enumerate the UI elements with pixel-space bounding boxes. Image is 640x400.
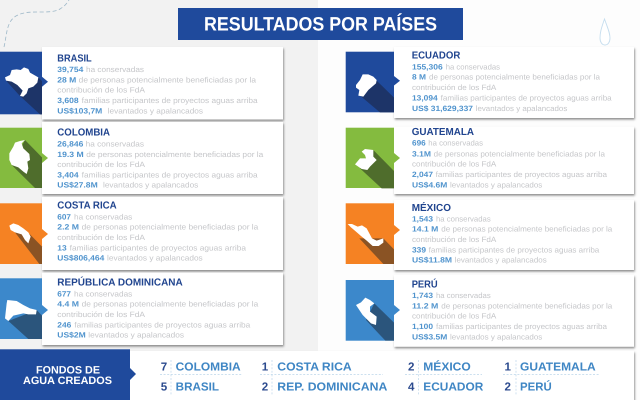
text: República Dominicana results: US$2M [57, 331, 86, 340]
text: Ecuador results: familias participantes de proyectos aguas arriba [441, 93, 612, 102]
list: fund counts per country: MÉXICO [423, 359, 471, 373]
icon: Colombia map [0, 128, 48, 188]
panel: República Dominicana [0, 273, 283, 345]
text: Guatemala results: contribución de los FdA [412, 160, 497, 169]
text: Ecuador results: 13,094 [412, 93, 438, 102]
text: Perú results: contribución de los FdA [412, 312, 497, 321]
text: Guatemala results: GUATEMALA [412, 127, 475, 138]
text: Perú results: 1,743 [412, 291, 433, 300]
icon: Perú map [346, 280, 400, 341]
text: Costa Rica results: de personas potencialmente beneficiadas por la [82, 223, 259, 232]
text: Perú results: ha conservadas [436, 291, 491, 300]
panel: Colombia [0, 122, 283, 194]
heading: fondos de agua creados: FONDOS DE [36, 364, 100, 376]
text: México results: ha conservadas [436, 214, 491, 223]
text: Ecuador results [412, 51, 612, 113]
text: Ecuador results: US$ 31,629,337 [412, 104, 473, 113]
text: Colombia results: de personas potencialmente beneficiadas por la [86, 150, 264, 159]
text: México results: 1,543 [412, 214, 433, 223]
text: Ecuador results: ha conservadas [446, 62, 500, 71]
text: Brasil results: de personas potencialmente beneficiadas por la [79, 76, 257, 84]
text: Perú results [412, 278, 613, 341]
panel: Perú [346, 275, 634, 347]
panel: México [346, 200, 634, 270]
text: Costa Rica results: COSTA RICA [57, 201, 117, 212]
text: Perú results: de personas potencialmente beneficiadas por la [441, 301, 613, 310]
text: México results: de personas potencialmente beneficiadas por la [441, 225, 613, 234]
text: Perú results: 11.2 M [412, 301, 438, 310]
text: Colombia results: ha conservadas [86, 139, 144, 148]
text: Perú results: PERÚ [412, 278, 438, 291]
list: fund counts per country: 1 [262, 360, 269, 373]
panel: Brasil [0, 47, 283, 120]
text: República Dominicana results: ha conservadas [74, 289, 132, 298]
text: Perú results: US$3.5M [412, 332, 447, 341]
text: Guatemala results: 3.1M [412, 149, 431, 158]
text: Guatemala results: 696 [412, 139, 426, 148]
text: México results: contribución de los FdA [412, 235, 497, 244]
text: México results: familias participantes de proyectos aguas arriba [429, 245, 600, 254]
text: Colombia results: familias participantes de proyectos aguas arriba [82, 170, 258, 179]
text: Colombia results: COLOMBIA [57, 128, 111, 139]
list: fund counts per country: 2 [504, 381, 511, 394]
text: Brasil results: 28 M [57, 76, 76, 84]
list: fund counts per country: 4 [408, 381, 415, 394]
text: Perú results: levantados y apalancados [450, 332, 542, 341]
list: fund counts per country: 5 [161, 381, 168, 394]
text: Brasil results: contribución de los FdA [57, 86, 146, 95]
text: República Dominicana results: 677 [57, 289, 71, 298]
list: fund counts per country: ECUADOR [423, 381, 484, 394]
panel: Guatemala [346, 127, 634, 194]
text: Perú results: familias participantes de proyectos aguas arriba [436, 322, 608, 331]
list: fund counts per country [161, 359, 596, 394]
text: República Dominicana results: contribución de los FdA [57, 310, 146, 319]
title banner [178, 8, 463, 40]
text: Guatemala results [412, 127, 608, 189]
text: República Dominicana results: de personas potencialmente beneficiadas por la [82, 300, 259, 309]
text: Colombia results: 26,846 [57, 139, 83, 148]
icon: Costa Rica map [0, 203, 48, 264]
icon: Brasil map [0, 52, 48, 114]
text: República Dominicana results: REPÚBLICA DOMINICANA [57, 276, 183, 289]
text: Costa Rica results: contribución de los FdA [57, 233, 146, 242]
panel: Ecuador [346, 47, 634, 118]
text: Guatemala results: familias participantes de proyectos aguas arriba [436, 170, 608, 179]
text: República Dominicana results [57, 276, 259, 340]
icon: Guatemala map [346, 128, 400, 188]
text: Costa Rica results: 13 [57, 243, 67, 252]
text: Guatemala results: levantados y apalancados [450, 180, 542, 189]
text: Ecuador results: de personas potencialmente beneficiadas por la [429, 73, 601, 82]
list: fund counts per country: COLOMBIA [176, 360, 241, 373]
list: fund counts per country: BRASIL [176, 381, 219, 394]
text: Costa Rica results: 607 [57, 212, 71, 221]
text: Guatemala results: US$4.6M [412, 180, 447, 189]
text: México results: levantados y apalancados [455, 256, 547, 265]
text: Brasil results: levantados y apalancados [108, 106, 203, 115]
text: Brasil results: BRASIL [57, 54, 92, 65]
text: Costa Rica results: 2.2 M [57, 223, 79, 232]
icon: Ecuador map [346, 52, 400, 112]
list: fund counts per country: GUATEMALA [520, 360, 596, 373]
list: fund counts per country: COSTA RICA [277, 360, 352, 373]
text: Costa Rica results: levantados y apalancados [107, 254, 203, 263]
list: fund counts per country: 1 [504, 360, 512, 373]
text: Colombia results: 19.3 M [57, 150, 84, 159]
text: México results: 339 [412, 245, 426, 254]
text: Ecuador results: 8 M [412, 73, 426, 82]
heading: fondos de agua creados [0, 349, 136, 400]
text: Brasil results: 3,608 [57, 96, 79, 105]
text: Perú results: 1,100 [412, 322, 433, 331]
panel: fondos de agua creados [0, 349, 634, 400]
title banner: RESULTADOS POR PAÍSES [204, 12, 437, 36]
text: Ecuador results: 155,306 [412, 62, 443, 71]
text: Guatemala results: ha conservadas [428, 139, 483, 148]
text: Colombia results: 3,404 [57, 170, 79, 179]
panel: Costa Rica [0, 197, 283, 270]
heading: fondos de agua creados: AGUA CREADOS [23, 375, 112, 387]
text: República Dominicana results: 246 [57, 320, 71, 329]
text: Colombia results: US$27.8M [57, 181, 98, 190]
text: República Dominicana results: 4.4 M [57, 300, 79, 309]
icon: México map [346, 203, 400, 264]
text: Costa Rica results: US$806,464 [57, 254, 105, 263]
text: México results: US$11.8M [412, 256, 452, 265]
text: Brasil results [57, 54, 258, 115]
text: Costa Rica results [57, 201, 259, 263]
text: Brasil results: familias participantes de proyectos aguas arriba [82, 96, 258, 105]
text: Ecuador results: contribución de los FdA [412, 83, 497, 92]
text: Costa Rica results: familias participantes de proyectos aguas arriba [70, 243, 247, 252]
text: México results: 14.1 M [412, 225, 438, 234]
list: fund counts per country: 2 [262, 381, 268, 394]
text: Ecuador results: levantados y apalancados [476, 104, 567, 113]
text: Guatemala results: 2,047 [412, 170, 433, 179]
list: fund counts per country: 7 [161, 360, 167, 373]
text: México results [412, 201, 613, 265]
text: Costa Rica results: ha conservadas [74, 212, 132, 221]
icon: República Dominicana map [0, 278, 48, 339]
text: Colombia results [57, 128, 264, 190]
text: Brasil results: US$103,7M [57, 106, 102, 115]
list: fund counts per country: REP. DOMINICANA [277, 381, 388, 394]
text: República Dominicana results: familias participantes de proyectos aguas arriba [74, 320, 251, 329]
text: Colombia results: contribución de los FdA [57, 160, 146, 169]
text: Guatemala results: de personas potencialmente beneficiadas por la [434, 149, 606, 158]
text: Brasil results: 39,754 [57, 65, 84, 74]
list: fund counts per country: 2 [408, 360, 414, 373]
text: Colombia results: levantados y apalancados [103, 181, 198, 190]
text: Ecuador results: ECUADOR [412, 51, 461, 62]
text: México results: MÉXICO [412, 201, 451, 214]
decorative dashed route [4, 0, 69, 47]
list: fund counts per country: PERÚ [520, 380, 552, 394]
icon: water drop [600, 19, 610, 45]
text: República Dominicana results: levantados y apalancados [88, 331, 184, 340]
text: Brasil results: ha conservadas [86, 65, 144, 74]
